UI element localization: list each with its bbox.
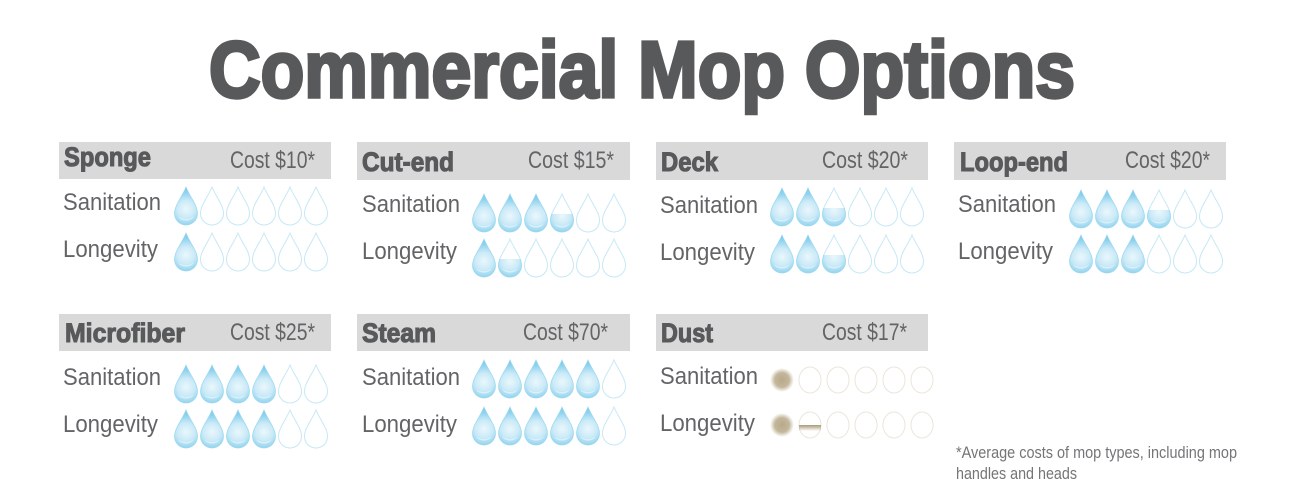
rating: Longevity 3 of 6 <box>1070 235 1222 273</box>
footnote: *Average costs of mop types, including mop <box>956 443 1237 462</box>
heading: Deck: Deck <box>661 147 719 177</box>
label: Longevity: Longevity <box>63 411 158 438</box>
panel: Microfiber <box>59 314 331 448</box>
label: Longevity: Longevity <box>660 410 755 437</box>
cost: Dust: Cost $17* <box>822 319 907 346</box>
cost: Sponge: Cost $10* <box>230 147 315 174</box>
heading: Loop-end: Loop-end <box>960 147 1068 177</box>
rating: Sanitation 4 of 6 <box>174 365 328 403</box>
panel: Sponge <box>59 142 331 271</box>
footnote <box>956 443 1237 483</box>
heading bar: Sponge <box>59 142 331 179</box>
heading bar: Dust <box>656 314 928 351</box>
cost: Loop-end: Cost $20* <box>1125 147 1210 174</box>
heading bar: Steam <box>357 314 630 351</box>
heading: Dust: Dust <box>661 318 713 348</box>
cost: Microfiber: Cost $25* <box>230 319 315 346</box>
rating: Sanitation 2.5 of 6 <box>770 188 924 226</box>
rating: Sanitation 3.5 of 6 <box>1070 190 1222 228</box>
rating: Longevity 2.5 of 6 <box>770 235 924 273</box>
label: Sanitation: Sanitation <box>660 192 758 219</box>
heading bar: Cut-end <box>357 142 630 180</box>
cost: Cut-end: Cost $15* <box>528 147 614 174</box>
label: Sanitation: Sanitation <box>958 191 1056 218</box>
label: Longevity: Longevity <box>63 236 158 263</box>
panel: Loop-end <box>954 142 1226 273</box>
title: Commercial Mop Options <box>209 25 1075 114</box>
heading: Microfiber: Microfiber <box>65 318 185 348</box>
label: Sanitation: Sanitation <box>63 364 161 391</box>
label: Longevity: Longevity <box>362 238 457 265</box>
heading: Steam: Steam <box>362 318 436 348</box>
label: Sanitation: Sanitation <box>660 363 758 390</box>
rating: Sanitation 5 of 6 <box>472 360 626 398</box>
label: Longevity: Longevity <box>660 239 755 266</box>
label: Longevity: Longevity <box>362 411 457 438</box>
label: Sanitation: Sanitation <box>63 189 161 216</box>
cost: Steam: Cost $70* <box>523 319 608 346</box>
rating: Sanitation 1 of 6 <box>174 187 328 225</box>
panel: Steam <box>357 314 630 445</box>
rating: Longevity 1 of 6 <box>174 233 328 271</box>
heading bar: Microfiber <box>59 314 331 351</box>
label: Sanitation: Sanitation <box>362 364 460 391</box>
heading: Cut-end: Cut-end <box>362 147 454 177</box>
heading: Sponge: Sponge <box>64 142 151 172</box>
panel: Cut-end <box>357 142 630 277</box>
label: Longevity: Longevity <box>958 238 1053 265</box>
rating: Longevity 5 of 6 <box>472 407 626 445</box>
panel: Dust <box>656 314 933 438</box>
rating: Sanitation 1 of 6 dust <box>770 367 933 393</box>
heading bar: Loop-end <box>954 142 1226 180</box>
heading bar: Deck <box>656 142 928 180</box>
label: Sanitation: Sanitation <box>362 191 460 218</box>
rating: Longevity 4 of 6 <box>174 410 328 448</box>
cost: Deck: Cost $20* <box>822 147 908 174</box>
rating: Longevity 1.5 of 6 dust <box>770 412 933 438</box>
rating: Sanitation 3.5 of 6 <box>472 194 626 232</box>
panel: Deck <box>656 142 928 273</box>
rating: Longevity 1.5 of 6 <box>472 239 626 277</box>
footnote: handles and heads <box>956 464 1077 483</box>
